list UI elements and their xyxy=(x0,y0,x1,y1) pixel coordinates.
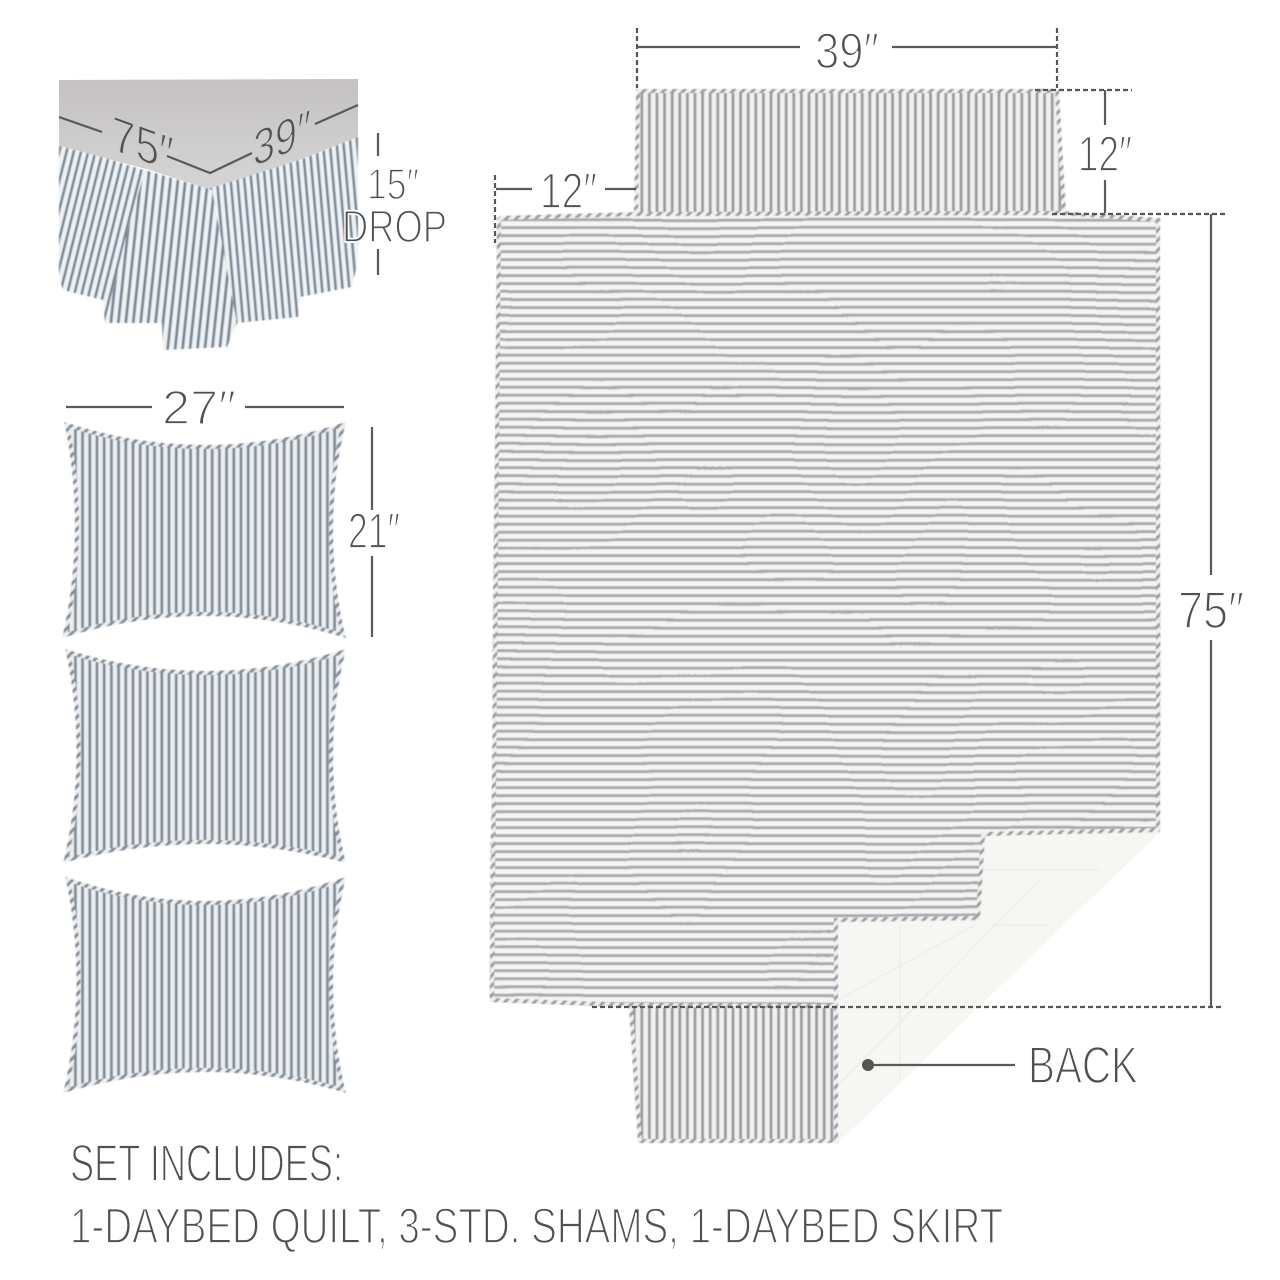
label: 75 inches: 75″ xyxy=(112,104,174,183)
sham 2 xyxy=(66,652,343,860)
right flap dimension: 12″ xyxy=(1078,126,1132,182)
pillow height dimension: 21″ xyxy=(348,503,400,559)
set includes text xyxy=(70,1135,1003,1254)
quilt back fold xyxy=(838,832,1160,1143)
drop dimension: 15″ xyxy=(367,160,419,209)
mattress top xyxy=(59,79,358,190)
back callout xyxy=(862,1037,1138,1095)
quilt length dimension: 75″ xyxy=(1178,582,1244,640)
bed skirt photo xyxy=(59,79,358,350)
quilt bottom flap xyxy=(629,1007,836,1143)
top width dimension: 39″ xyxy=(815,23,879,79)
back callout: BACK xyxy=(1028,1037,1138,1095)
set includes text: 1-DAYBED QUILT, 3-STD. SHAMS, 1-DAYBED SKIRT xyxy=(70,1198,1003,1254)
skirt width lines xyxy=(59,117,102,132)
pillow width dimension: 27″ xyxy=(162,382,236,435)
quilt binding xyxy=(492,213,1158,1006)
quilt xyxy=(490,89,1160,1143)
quilt main striped face xyxy=(490,213,1160,1007)
drop dimension xyxy=(342,133,447,275)
sham 1 xyxy=(65,425,343,635)
drop dimension: DROP xyxy=(342,201,447,252)
sham 3 xyxy=(66,880,343,1090)
quilt top flap xyxy=(636,89,1064,214)
set includes text: SET INCLUDES: xyxy=(70,1135,343,1193)
label: 39 inches: 39″ xyxy=(253,99,311,179)
skirt fabric xyxy=(59,137,358,350)
left flap dimension: 12″ xyxy=(540,163,597,219)
